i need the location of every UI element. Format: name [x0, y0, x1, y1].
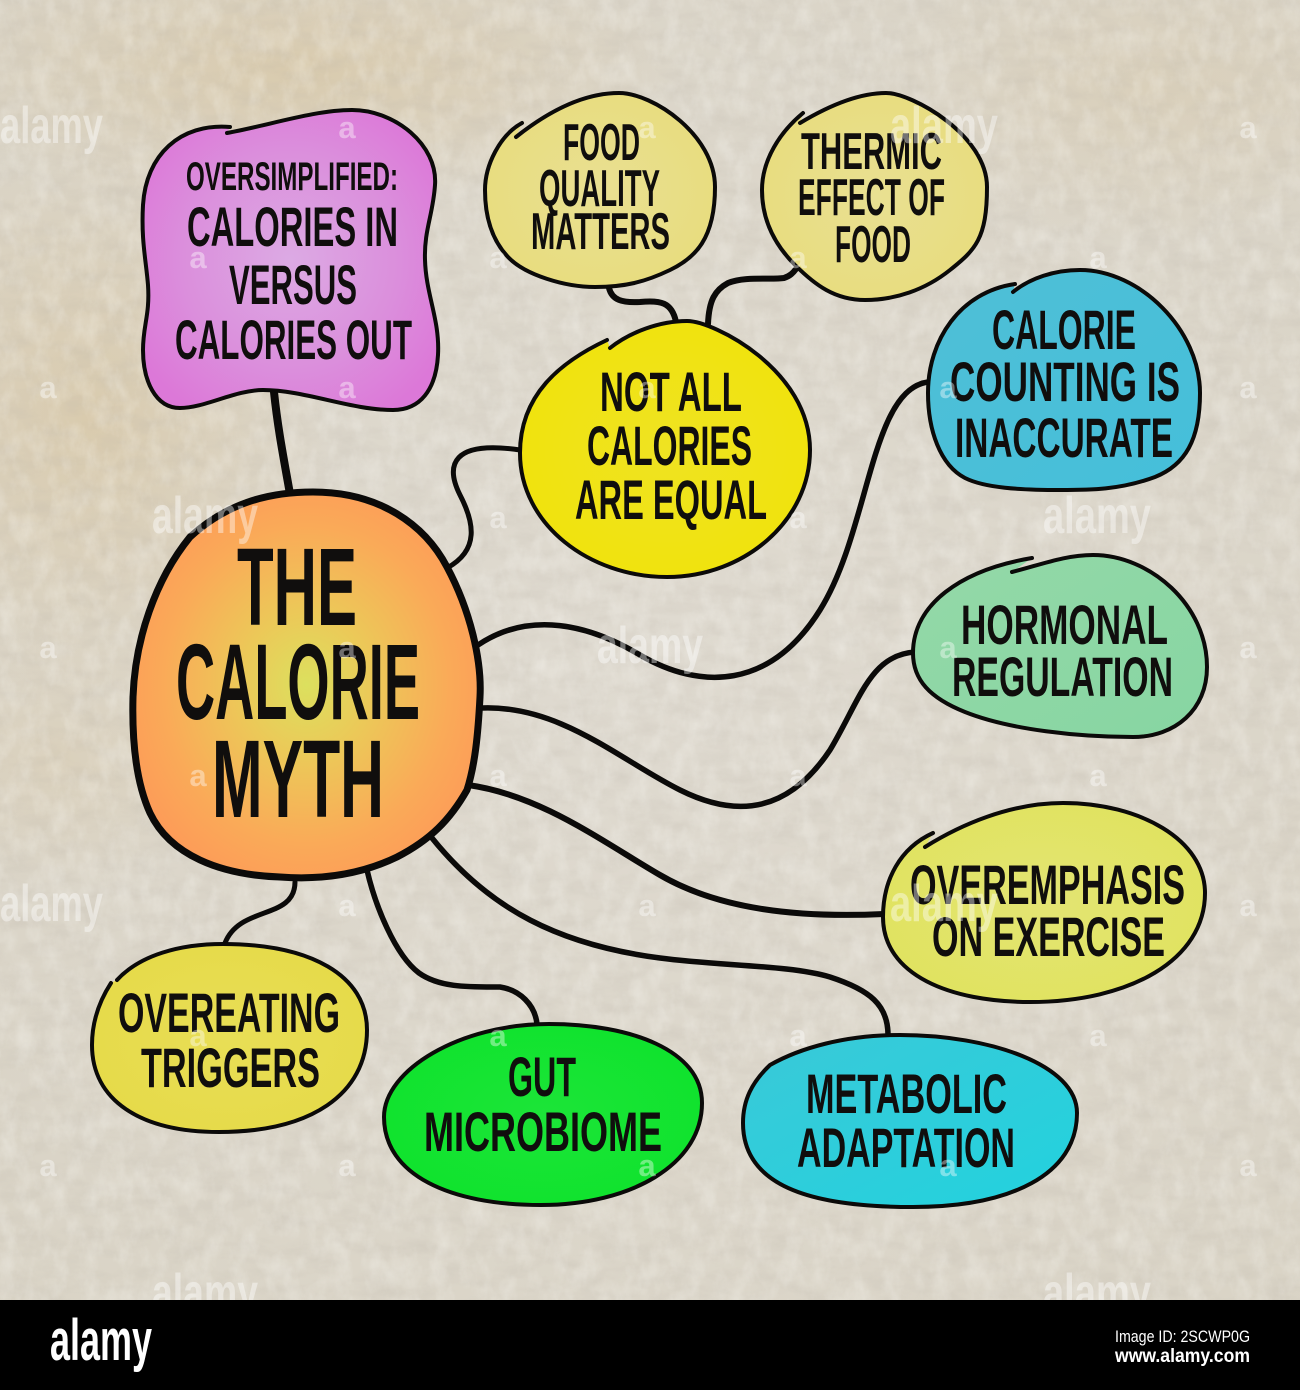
watermarks: a — [638, 110, 656, 145]
watermarks: a — [1089, 758, 1107, 793]
connector: main to hormonal regulation — [482, 652, 915, 806]
watermarks: a — [489, 500, 507, 535]
text: food quality matters — [531, 114, 670, 261]
text: hormonal regulation: HORMONAL — [961, 593, 1168, 656]
watermarks: a — [1239, 370, 1257, 405]
text: overeating triggers: TRIGGERS — [141, 1036, 320, 1099]
node: calorie counting is inaccurate — [928, 270, 1200, 490]
watermarks: a — [189, 240, 207, 275]
connector: main to overemphasis on exercise — [468, 785, 884, 915]
watermarks: a — [39, 630, 57, 665]
text: oversimplified: CALORIES IN — [187, 195, 398, 258]
watermarks: a — [1089, 240, 1107, 275]
text: food quality matters: QUALITY — [539, 160, 660, 218]
watermarks: alamy — [0, 875, 103, 933]
text: thermic effect of food: THERMIC — [801, 123, 942, 181]
text: thermic effect of food: EFFECT OF — [798, 169, 945, 227]
node: overemphasis on exercise — [883, 803, 1205, 1002]
watermarks: a — [789, 758, 807, 793]
watermarks: a — [489, 1018, 507, 1053]
watermarks: a — [789, 500, 807, 535]
text: overeating triggers: OVEREATING — [118, 981, 340, 1044]
connector: main to metabolic adaptation — [432, 838, 888, 1035]
footer url: www.alamy.com — [1114, 1346, 1250, 1367]
node: thermic effect of food — [762, 93, 987, 300]
watermarks: a — [1239, 1148, 1257, 1183]
watermarks: a — [189, 1018, 207, 1053]
text: oversimplified — [175, 155, 412, 371]
text: gut microbiome: GUT — [508, 1045, 576, 1108]
text: food quality matters: MATTERS — [531, 203, 670, 261]
footer bar — [0, 1300, 1300, 1390]
watermarks: alamy — [152, 1264, 258, 1322]
watermarks: a — [338, 888, 356, 923]
node: not all calories are equal — [520, 321, 810, 577]
watermarks: alamy — [890, 875, 998, 933]
watermarks: a — [939, 1148, 957, 1183]
watermarks: a — [338, 630, 356, 665]
text: calorie counting is inaccurate — [950, 298, 1180, 469]
text: hormonal regulation — [952, 593, 1173, 708]
text: thermic effect of food — [798, 123, 945, 274]
text: not all calories are equal: NOT ALL — [600, 360, 742, 423]
text: gut microbiome: MICROBIOME — [424, 1100, 662, 1163]
watermarks: a — [789, 240, 807, 275]
node: overeating triggers — [92, 944, 367, 1132]
watermarks: a — [489, 758, 507, 793]
watermarks: alamy — [597, 617, 703, 675]
watermarks: a — [338, 370, 356, 405]
heading: the calorie myth — [176, 526, 420, 841]
node: food quality matters — [485, 93, 715, 287]
watermarks: alamy — [890, 97, 998, 155]
text: overeating triggers — [118, 981, 340, 1099]
watermarks: a — [489, 240, 507, 275]
watermarks: a — [1239, 888, 1257, 923]
heading: the calorie myth: CALORIE — [176, 621, 420, 742]
text: metabolic adaptation: METABOLIC — [806, 1062, 1007, 1125]
footer image id: Image ID: 2SCWP0G — [1115, 1327, 1250, 1346]
footer logo: alamy — [50, 1308, 152, 1373]
text: thermic effect of food: FOOD — [835, 216, 911, 274]
watermarks: a — [638, 888, 656, 923]
connector: not all calories to thermic effect — [708, 269, 796, 324]
text: oversimplified: CALORIES OUT — [175, 308, 412, 371]
watermarks: a — [939, 630, 957, 665]
text: not all calories are equal: CALORIES — [587, 414, 752, 477]
watermarks: a — [789, 1018, 807, 1053]
node: hormonal regulation — [913, 555, 1207, 737]
text: metabolic adaptation: ADAPTATION — [797, 1116, 1015, 1179]
node: gut microbiome — [384, 1024, 702, 1205]
watermarks: a — [338, 1148, 356, 1183]
watermarks: a — [39, 1148, 57, 1183]
node: the calorie myth — [133, 492, 480, 878]
watermarks: alamy — [152, 487, 258, 545]
watermarks: a — [338, 110, 356, 145]
text: oversimplified: OVERSIMPLIFIED: — [186, 155, 398, 199]
heading: the calorie myth: THE — [237, 526, 357, 649]
watermarks: alamy — [1043, 1264, 1151, 1322]
text: food quality matters: FOOD — [563, 114, 640, 172]
text: not all calories are equal — [575, 360, 767, 531]
watermarks: a — [638, 370, 656, 405]
watermarks: a — [189, 758, 207, 793]
node: oversimplified — [143, 110, 438, 410]
text: oversimplified: VERSUS — [229, 253, 357, 316]
heading: the calorie myth: MYTH — [212, 718, 384, 841]
watermarks: a — [638, 1148, 656, 1183]
watermarks: alamy — [0, 97, 103, 155]
connector: not all calories to food quality — [609, 288, 676, 322]
watermarks: a — [939, 370, 957, 405]
connector: main to gut microbiome — [367, 870, 537, 1024]
watermarks: a — [1239, 110, 1257, 145]
node: metabolic adaptation — [743, 1035, 1077, 1207]
text: metabolic adaptation — [797, 1062, 1015, 1179]
connector: main to calorie counting — [478, 382, 928, 677]
watermarks: alamy — [1043, 487, 1151, 545]
connector: main to not all calories — [447, 448, 520, 568]
text: gut microbiome — [424, 1045, 662, 1163]
watermarks: a — [39, 370, 57, 405]
watermarks: a — [1239, 630, 1257, 665]
text: calorie counting is inaccurate: CALORIE — [992, 298, 1136, 361]
text: overemphasis on exercise — [910, 853, 1185, 968]
watermarks: a — [1089, 1018, 1107, 1053]
connector: main to oversimplified — [274, 392, 290, 494]
text: not all calories are equal: ARE EQUAL — [575, 468, 767, 531]
connector: main to overeating triggers — [225, 882, 295, 943]
